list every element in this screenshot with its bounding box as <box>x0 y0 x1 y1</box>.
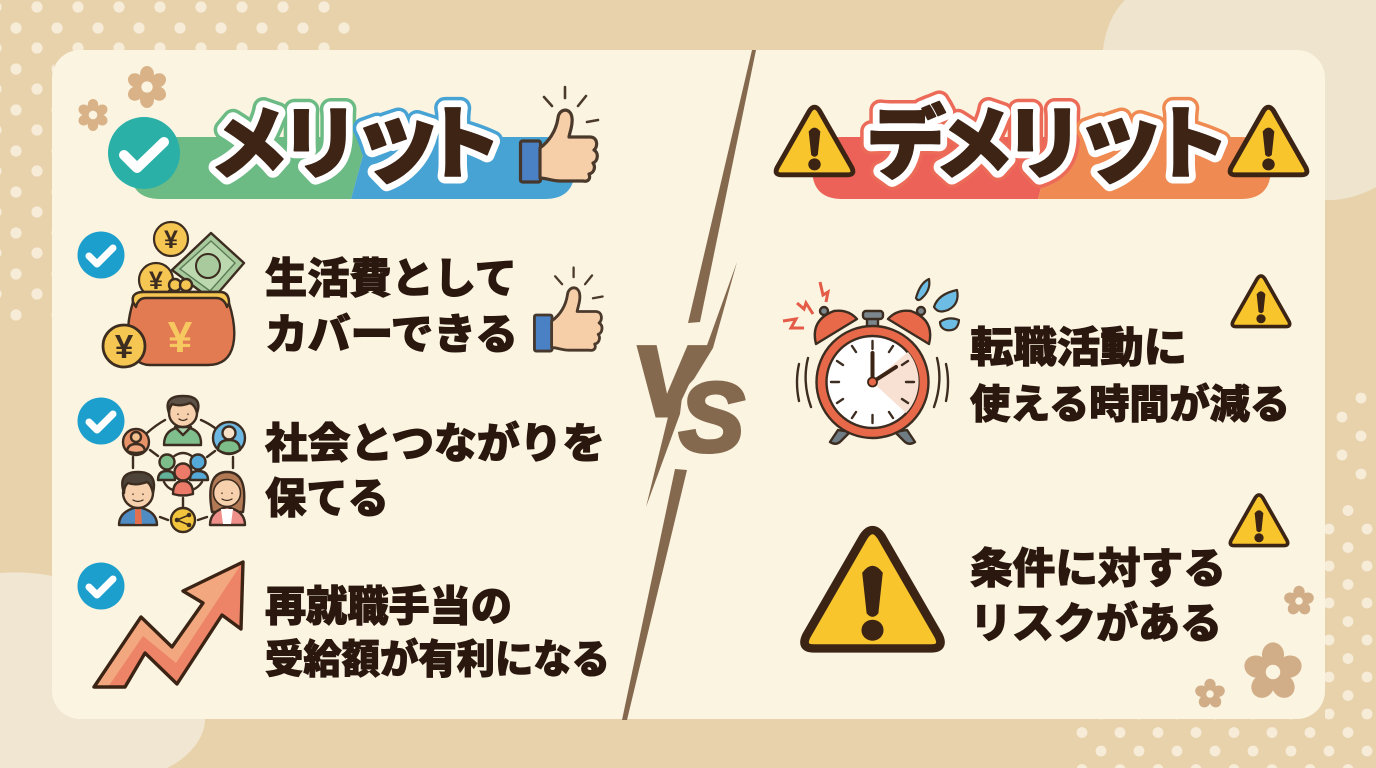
divider line lower <box>622 469 687 720</box>
heading bar <box>812 137 1271 199</box>
heading text: merit: ッ <box>351 92 443 194</box>
item text <box>265 420 605 522</box>
icon: large warning <box>805 530 940 648</box>
icon: thumbs up <box>534 267 603 351</box>
demerit item 2 <box>805 495 1288 648</box>
merit item 2 <box>78 396 605 532</box>
heading text: merit: メ <box>209 100 289 189</box>
heading text: merit: メ <box>209 100 289 189</box>
heading text: demerit: ト <box>1150 100 1230 189</box>
icon: warning <box>1230 495 1288 546</box>
heading text: demerit: ッ <box>1074 92 1166 194</box>
heading text: merit: ッ <box>351 92 443 194</box>
icon: coin purse with money: ¥ <box>164 226 178 254</box>
icon: thumbs up heading <box>520 87 598 182</box>
heading text: demerit: ッ <box>1074 92 1166 194</box>
item text <box>970 324 1290 427</box>
VS mark <box>630 262 744 507</box>
heading bar <box>130 137 575 199</box>
check badge <box>78 562 124 610</box>
item text: 使える時間が減る <box>970 382 1290 427</box>
merit heading <box>108 87 598 199</box>
heading text: merit: ト <box>422 100 502 189</box>
heading text: merit: メ <box>209 100 289 189</box>
heading text: demerit: リ <box>1004 100 1084 189</box>
heading text: merit: リ <box>280 100 360 189</box>
icon: rising arrow <box>94 562 243 687</box>
item text: 受給額が有利になる <box>265 637 610 682</box>
item text: リスクがある <box>970 600 1222 647</box>
item text <box>265 255 518 358</box>
VS mark: S <box>679 362 744 472</box>
check badge <box>78 232 124 278</box>
heading text: merit <box>209 92 502 194</box>
icon: coin purse with money: ¥ <box>168 313 193 362</box>
heading text: demerit: デ <box>866 100 946 189</box>
heading text: demerit: メ <box>934 100 1014 189</box>
heading text: merit: ト <box>422 100 502 189</box>
item text: 社会とつながりを <box>265 420 605 467</box>
merit item 1 <box>78 222 603 367</box>
icon: coin purse with money: ¥ <box>115 328 134 365</box>
heading text: demerit: ト <box>1150 100 1230 189</box>
heading text: demerit <box>866 92 1230 194</box>
item text: 再就職手当の <box>265 583 512 630</box>
demerit item 1 <box>783 276 1290 444</box>
icon: alarm clock <box>783 279 959 444</box>
icon: coin purse with money <box>103 222 244 367</box>
heading text: demerit: デ <box>866 100 946 189</box>
heading text: demerit: リ <box>1004 100 1084 189</box>
icon: warning <box>1232 276 1290 327</box>
item text: 生活費として <box>265 255 517 302</box>
item text: 転職活動に <box>970 324 1187 371</box>
heading text: merit: ッ <box>351 92 443 194</box>
heading text: merit: リ <box>280 100 360 189</box>
heading text: demerit: ッ <box>1074 92 1166 194</box>
demerit heading <box>776 92 1307 199</box>
item text <box>265 583 610 682</box>
check badge <box>78 398 124 444</box>
icon: warning right <box>1230 107 1307 175</box>
heading text: demerit: リ <box>1004 100 1084 189</box>
icon: warning left <box>776 107 853 175</box>
icon: people network <box>119 396 245 532</box>
VS divider <box>622 50 756 720</box>
decorative flowers bottom-right <box>1194 586 1315 710</box>
icon: coin purse with money: ¥ <box>149 267 163 295</box>
heading text: merit: ト <box>422 100 502 189</box>
heading text: demerit: メ <box>934 100 1014 189</box>
item text: 保てる <box>265 475 389 522</box>
heading text: demerit: ト <box>1150 100 1230 189</box>
item text: 条件に対する <box>970 545 1226 592</box>
VS mark: V <box>630 326 707 436</box>
merit item 3 <box>78 562 610 687</box>
heading text: demerit: デ <box>866 100 946 189</box>
heading text: demerit: メ <box>934 100 1014 189</box>
item text: カバーできる <box>265 311 518 358</box>
decorative flowers top-left <box>77 66 169 131</box>
divider line upper <box>688 50 756 323</box>
heading text: merit: リ <box>280 100 360 189</box>
item text <box>970 545 1226 647</box>
icon: heading check badge <box>108 117 180 189</box>
